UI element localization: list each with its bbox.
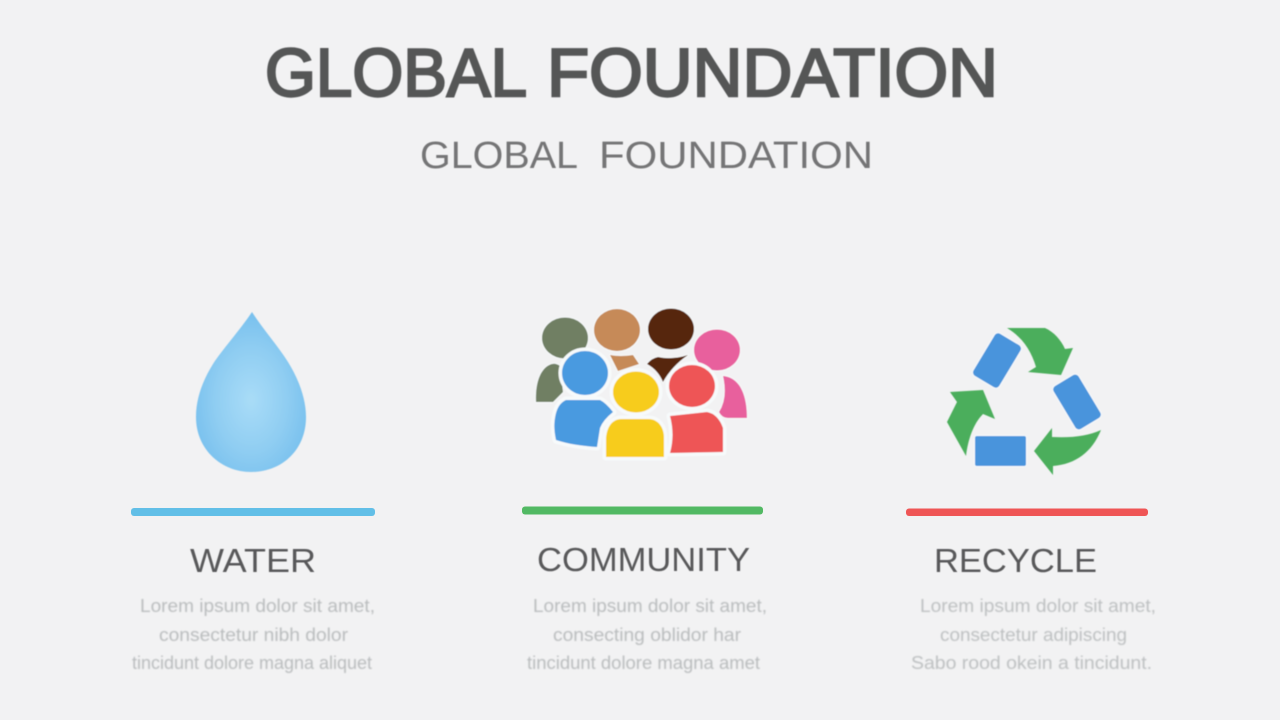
panel: water	[131, 312, 375, 673]
community divider	[522, 506, 763, 514]
community heading: COMMUNITY	[537, 541, 750, 578]
recycle text: consectetur adipiscing	[940, 625, 1127, 645]
icon: group of people	[536, 308, 747, 457]
person: red	[669, 365, 723, 453]
person: blue	[554, 351, 613, 447]
community text: tincidunt dolore magna amet	[527, 653, 760, 673]
recycle text	[911, 596, 1156, 673]
panel: community	[522, 308, 767, 673]
subtitle	[420, 135, 873, 177]
water text: consectetur nibh dolor	[159, 625, 348, 645]
icon: water drop	[196, 312, 306, 472]
icon: recycling symbol	[947, 328, 1102, 475]
recycle divider	[906, 508, 1148, 516]
title: GLOBAL	[265, 35, 527, 111]
water text	[132, 596, 375, 673]
community text: Lorem ipsum dolor sit amet,	[533, 596, 767, 616]
water text: Lorem ipsum dolor sit amet,	[140, 596, 375, 616]
person: yellow	[606, 372, 664, 457]
subtitle: FOUNDATION	[599, 135, 873, 177]
person: pink	[694, 330, 747, 418]
water divider	[131, 508, 375, 516]
community text	[527, 596, 767, 673]
subtitle: GLOBAL	[420, 135, 578, 177]
recycle text: Lorem ipsum dolor sit amet,	[920, 596, 1156, 616]
recycle blue blocks	[972, 332, 1102, 466]
water text: tincidunt dolore magna aliquet	[132, 653, 372, 673]
recycle green arrows	[947, 328, 1101, 475]
panel: recycle	[906, 328, 1156, 673]
person: dark brown	[647, 308, 694, 382]
person: tan	[594, 309, 640, 371]
person: olive	[536, 318, 588, 402]
title	[265, 35, 998, 111]
recycle heading: RECYCLE	[934, 542, 1097, 579]
water heading: WATER	[190, 542, 316, 579]
recycle text: Sabo rood okein a tincidunt.	[911, 653, 1152, 673]
title: FOUNDATION	[547, 35, 998, 111]
community text: consecting oblidor har	[553, 625, 741, 645]
